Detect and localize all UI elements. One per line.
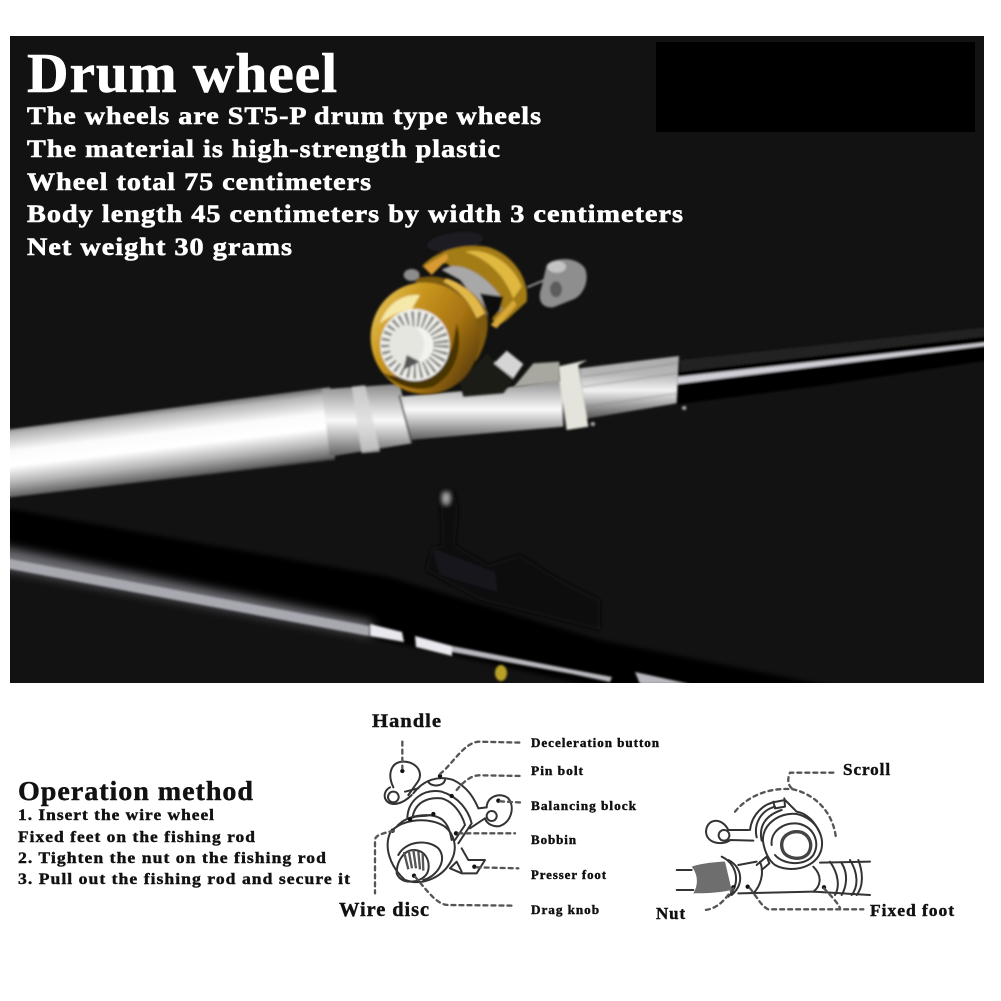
spec line 1: The wheels are ST5-P drum type wheels <box>27 103 542 130</box>
silver rod section <box>5 387 335 498</box>
reflected rod highlights <box>5 558 690 684</box>
presser foot <box>450 848 485 873</box>
gold drum highlight <box>443 278 485 318</box>
handle shade <box>550 281 562 297</box>
reflected handle base <box>432 548 498 592</box>
reflected handle <box>425 490 600 630</box>
rod body <box>676 337 984 404</box>
panel: operation method <box>18 776 351 888</box>
label: pin bolt: Pin bolt <box>531 764 584 778</box>
gold brace <box>491 300 517 328</box>
label: handle: Handle <box>372 711 442 732</box>
gold disc <box>360 272 490 404</box>
label: presser foot: Presser foot <box>531 868 607 882</box>
leader bobbin <box>458 830 515 837</box>
frame inner arcs <box>407 791 472 843</box>
threaded section <box>579 356 679 419</box>
rod highlight line <box>677 342 990 384</box>
drag knob <box>397 850 429 882</box>
disc inner ring <box>772 823 816 863</box>
spool opening <box>782 832 811 858</box>
spec line 3: Wheel total 75 centimeters <box>27 169 372 196</box>
silver pin <box>404 269 420 281</box>
leader wire disc <box>375 831 393 893</box>
leader scroll <box>788 773 833 789</box>
collar ring <box>352 385 380 453</box>
step 2: 2. Tighten the nut on the fishing rod <box>18 850 327 867</box>
tube section <box>400 379 563 440</box>
spool disc <box>397 815 452 840</box>
rod upper sheen <box>680 327 990 372</box>
leader fixed foot branch <box>824 888 840 908</box>
collar edge <box>399 395 412 443</box>
leader drag <box>415 877 515 906</box>
gold side drum <box>400 276 488 390</box>
reel mount shadow <box>460 353 513 397</box>
label: balancing block: Balancing block <box>531 799 637 813</box>
panel: product specification text <box>27 43 684 261</box>
ring highlights <box>370 624 452 656</box>
threaded nut <box>692 862 732 893</box>
drag knob shadow <box>403 355 420 370</box>
reel foot cube <box>494 351 523 379</box>
leader pin bolt <box>457 775 523 790</box>
photo background <box>10 36 984 683</box>
gold disc highlight <box>380 295 420 323</box>
handle knob outline <box>390 762 420 795</box>
operation heading: Operation method <box>18 776 254 806</box>
title: Drum wheel <box>27 43 338 105</box>
reel body back <box>750 798 820 841</box>
fixed foot left <box>753 857 769 893</box>
saddle bulge <box>513 362 560 387</box>
yellow reflection <box>495 665 507 681</box>
reflected rod soft highlight <box>0 546 372 636</box>
knob ribs <box>404 850 423 871</box>
inner body ring <box>398 843 442 880</box>
reel <box>360 228 587 404</box>
label: scroll: Scroll <box>843 760 891 779</box>
connector points <box>733 880 824 894</box>
leader nut <box>705 888 733 910</box>
rear gold plate <box>422 246 527 327</box>
rear gold highlight <box>465 251 522 298</box>
main reflection streak <box>5 558 369 636</box>
panel: product photo <box>0 36 990 690</box>
reflection of rod and reel <box>5 490 850 690</box>
rod fittings and reel <box>322 228 684 457</box>
connector points <box>393 771 498 876</box>
step 3: 3. Pull out the fishing rod and secure it <box>18 871 351 888</box>
step 1 continued: Fixed feet on the fishing rod <box>18 829 256 846</box>
handle arm <box>527 278 548 287</box>
step 1: 1. Insert the wire wheel <box>18 807 215 824</box>
gold upper brace <box>423 253 448 275</box>
diagram: reel parts <box>375 742 523 906</box>
nut collar <box>722 857 740 897</box>
label: bobbin: Bobbin <box>531 833 577 847</box>
thread marks <box>583 363 677 407</box>
small screw dots <box>593 408 684 424</box>
handle arm <box>385 787 418 804</box>
leader deceleration <box>440 742 523 774</box>
main body <box>388 820 455 882</box>
drag knob center <box>389 325 424 365</box>
black rod section <box>672 327 990 404</box>
handle ring <box>706 821 753 843</box>
reflected rod dark band <box>5 508 850 690</box>
spec line 2: The material is high-strength plastic <box>27 136 501 163</box>
gold disc inner shade <box>383 323 459 389</box>
frame top arc <box>413 778 487 808</box>
leader presser <box>477 867 518 868</box>
spool <box>442 266 502 318</box>
reflected highlight spot <box>442 492 450 504</box>
leader fixed foot <box>750 888 863 909</box>
label: deceleration button: Deceleration button <box>531 736 660 750</box>
rod collar <box>322 356 684 457</box>
label: wire disc: Wire disc <box>339 899 430 921</box>
black knob <box>428 232 482 253</box>
reel body disc <box>763 814 822 869</box>
rod left line <box>677 862 813 893</box>
spool dark <box>480 293 503 322</box>
rod rings <box>830 860 862 895</box>
spec line 5: Net weight 30 grams <box>27 234 293 261</box>
diagram: rod mount <box>677 773 870 910</box>
collar body <box>322 384 412 457</box>
lower highlight <box>452 646 690 684</box>
leader balancing <box>500 801 523 803</box>
diagram labels <box>339 711 955 923</box>
spec line 4: Body length 45 centimeters by width 3 centimeters <box>27 201 684 228</box>
knurled ring <box>557 360 588 430</box>
label: fixed foot: Fixed foot <box>870 901 955 920</box>
label: drag knob: Drag knob <box>531 903 600 917</box>
scroll arc <box>735 789 836 838</box>
leader handle <box>399 742 406 768</box>
handle highlight <box>547 261 566 273</box>
drag knob ribs <box>389 319 441 371</box>
label: nut: Nut <box>656 904 686 923</box>
balancing block <box>470 795 512 828</box>
fixed foot right <box>813 862 870 895</box>
black masking rectangle <box>656 42 975 132</box>
handle knob <box>540 259 587 307</box>
drag knob base <box>380 309 450 381</box>
